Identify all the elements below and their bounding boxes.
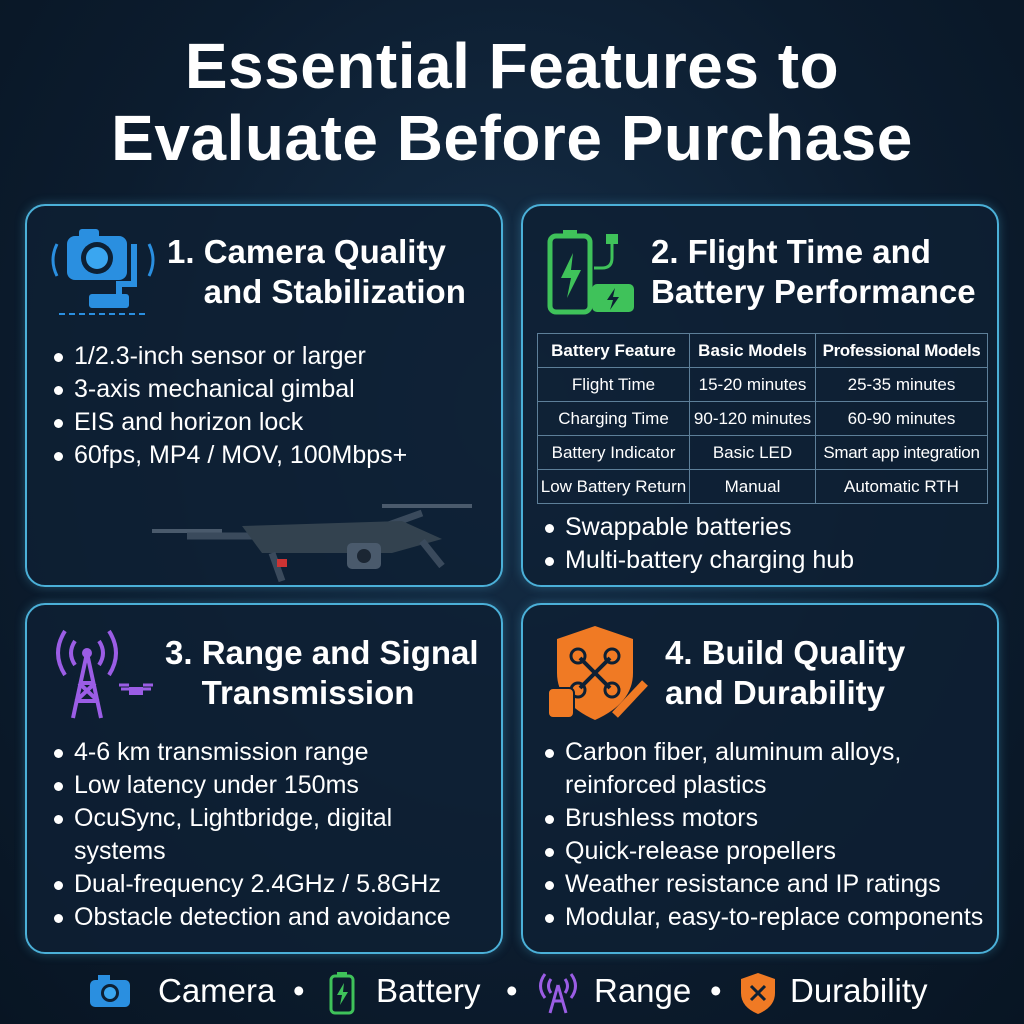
table: battery comparison: Battery Indicator <box>552 442 675 462</box>
legend: camera <box>90 972 276 1009</box>
list: durability: Weather resistance and IP ratings <box>565 870 941 898</box>
list: camera <box>54 342 407 469</box>
table: battery comparison: 25-35 minutes <box>848 374 955 394</box>
title <box>111 30 913 174</box>
legend: durability <box>741 972 928 1014</box>
list: range: Low latency under 150ms <box>74 771 359 799</box>
list: range: OcuSync, Lightbridge, digital <box>74 804 392 832</box>
list: range: systems <box>74 837 166 865</box>
icon: drone silhouette <box>152 504 472 582</box>
list: battery: Swappable batteries <box>565 513 792 541</box>
panel: battery <box>521 204 999 587</box>
heading: battery <box>651 233 976 310</box>
list: range: 4-6 km transmission range <box>74 738 369 766</box>
list: durability <box>545 738 983 931</box>
list: range: Obstacle detection and avoidance <box>74 903 451 931</box>
icon: battery <box>548 230 634 314</box>
list: battery: Multi-battery charging hub <box>565 546 854 574</box>
icon: camera gimbal <box>52 229 154 315</box>
table: battery comparison: Charging Time <box>558 408 669 428</box>
icon: shield with drone <box>549 626 648 720</box>
table: battery comparison: Basic Models <box>698 340 807 360</box>
legend <box>90 972 928 1014</box>
table: battery comparison: Battery Feature <box>551 340 676 360</box>
legend: • <box>506 972 518 1009</box>
table: battery comparison: 90-120 minutes <box>694 408 811 428</box>
legend: Battery <box>376 972 481 1009</box>
list: durability: reinforced plastics <box>565 771 766 799</box>
heading: camera: and Stabilization <box>204 273 466 310</box>
list: camera: 60fps, MP4 / MOV, 100Mbps+ <box>74 441 407 469</box>
heading: range <box>165 634 479 711</box>
table: battery comparison: Basic LED <box>713 442 792 462</box>
table: battery comparison: Manual <box>725 476 780 496</box>
legend: • <box>293 972 305 1009</box>
heading: camera <box>167 233 466 310</box>
table: battery comparison: Low Battery Return <box>541 476 686 496</box>
icon: signal tower <box>56 630 153 718</box>
legend: Durability <box>790 972 928 1009</box>
list: durability: Brushless motors <box>565 804 758 832</box>
legend: range <box>539 972 691 1014</box>
list: range <box>54 738 451 931</box>
table: battery comparison: Professional Models <box>823 340 980 360</box>
list: camera: 3-axis mechanical gimbal <box>74 375 355 403</box>
list: range: Dual-frequency 2.4GHz / 5.8GHz <box>74 870 441 898</box>
list: battery <box>545 513 854 574</box>
panel: camera <box>25 204 503 587</box>
heading: battery: 2. Flight Time and <box>651 233 931 270</box>
table: battery comparison: 15-20 minutes <box>699 374 806 394</box>
list: camera: EIS and horizon lock <box>74 408 303 436</box>
heading: durability: and Durability <box>665 674 885 711</box>
legend: • <box>710 972 722 1009</box>
list: durability: Carbon fiber, aluminum alloys, <box>565 738 901 766</box>
legend: Range <box>594 972 691 1009</box>
heading: range: Transmission <box>202 674 414 711</box>
list: camera: 1/2.3-inch sensor or larger <box>74 342 366 370</box>
heading: camera: 1. Camera Quality <box>167 233 446 270</box>
heading: battery: Battery Performance <box>651 273 976 310</box>
panel: range <box>25 603 503 954</box>
table: battery comparison: 60-90 minutes <box>848 408 955 428</box>
heading: range: 3. Range and Signal <box>165 634 479 671</box>
legend: battery <box>330 972 481 1014</box>
table: battery comparison: Flight Time <box>572 374 655 394</box>
table: battery comparison <box>537 333 988 504</box>
legend: Camera <box>158 972 275 1009</box>
list: durability: Modular, easy-to-replace components <box>565 903 983 931</box>
heading: durability <box>665 634 905 711</box>
table: battery comparison: Automatic RTH <box>844 476 959 496</box>
title: Essential Features to <box>185 30 839 102</box>
title: Evaluate Before Purchase <box>111 102 913 174</box>
table: battery comparison: Smart app integration <box>823 442 980 462</box>
heading: durability: 4. Build Quality <box>665 634 905 671</box>
list: durability: Quick-release propellers <box>565 837 836 865</box>
panel: durability <box>521 603 999 954</box>
